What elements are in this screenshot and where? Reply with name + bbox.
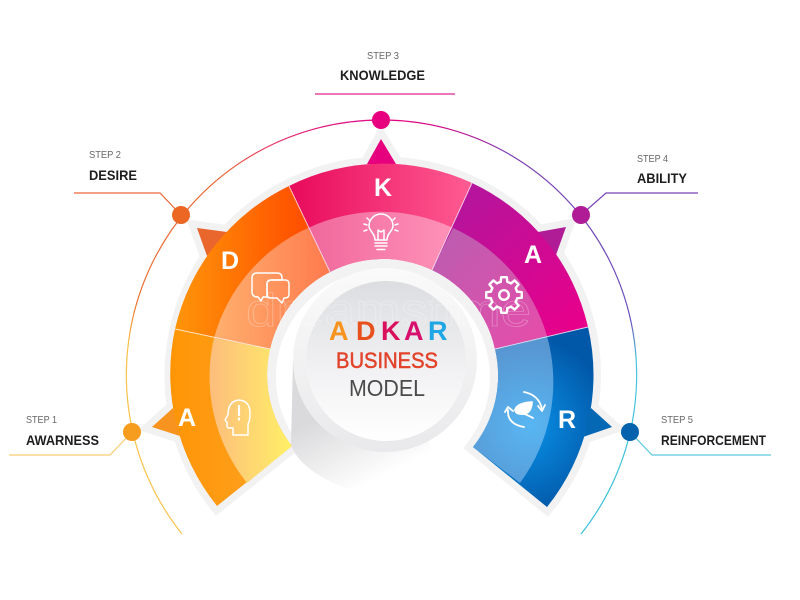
label: step 2 desire <box>89 149 137 183</box>
center title: ADKAR: D <box>356 316 376 346</box>
segment A: ability <box>432 183 588 349</box>
letter A: A <box>524 241 542 269</box>
icon: light bulb <box>364 214 398 250</box>
icon: gear <box>486 277 522 313</box>
label: step 5 reinforcement: REINFORCEMENT <box>661 432 766 448</box>
label: step 1 awarness <box>26 414 99 448</box>
outer ring: right half <box>381 120 637 534</box>
center title: BUSINESS: BUSINESS <box>336 348 438 373</box>
label: step 3 knowledge: STEP 3 <box>367 50 399 62</box>
segment D: desire <box>175 186 330 349</box>
label: step 3 knowledge <box>340 50 425 83</box>
center title: MODEL: MODEL <box>349 375 425 401</box>
outer ring: left half <box>126 120 381 534</box>
segment K: knowledge <box>289 139 472 272</box>
icon: chat bubbles <box>252 273 289 303</box>
label: step 3 knowledge: KNOWLEDGE <box>340 67 425 83</box>
label: step 5 reinforcement <box>661 414 766 448</box>
label: step 5 reinforcement: STEP 5 <box>661 414 693 426</box>
label: step 2 desire: DESIRE <box>89 167 137 183</box>
segment pale outline <box>152 139 612 507</box>
label: step 4 ability: ABILITY <box>637 170 688 186</box>
label: step 2 desire: STEP 2 <box>89 149 121 161</box>
center long shadow <box>291 360 432 488</box>
node and leader: step 4 <box>572 193 698 224</box>
letter K: K <box>374 174 392 202</box>
icon: leaf with cycle arrows <box>505 392 545 427</box>
center disk <box>293 268 477 452</box>
segment R: reinforcement <box>473 327 612 507</box>
letter D: D <box>221 247 239 275</box>
letter A: A <box>178 404 196 432</box>
center title: ADKAR: A <box>329 316 348 346</box>
node and leader: step 5 <box>621 423 771 455</box>
letter R: R <box>558 406 576 434</box>
label: step 4 ability: STEP 4 <box>637 153 668 165</box>
watermark: dreamstime <box>246 284 531 336</box>
center title: ADKAR: K <box>381 316 401 346</box>
node and leader: step 3 <box>315 94 455 129</box>
center title: ADKAR: A <box>404 316 424 346</box>
node and leader: step 2 <box>74 193 190 224</box>
segment A: awareness <box>152 329 292 506</box>
label: step 1 awarness: STEP 1 <box>26 414 57 426</box>
icon: head with exclamation <box>225 400 250 435</box>
label: step 1 awarness: AWARNESS <box>26 432 99 448</box>
label: step 4 ability <box>637 153 688 186</box>
node and leader: step 1 <box>9 423 141 455</box>
center title: ADKAR: R <box>428 316 448 346</box>
